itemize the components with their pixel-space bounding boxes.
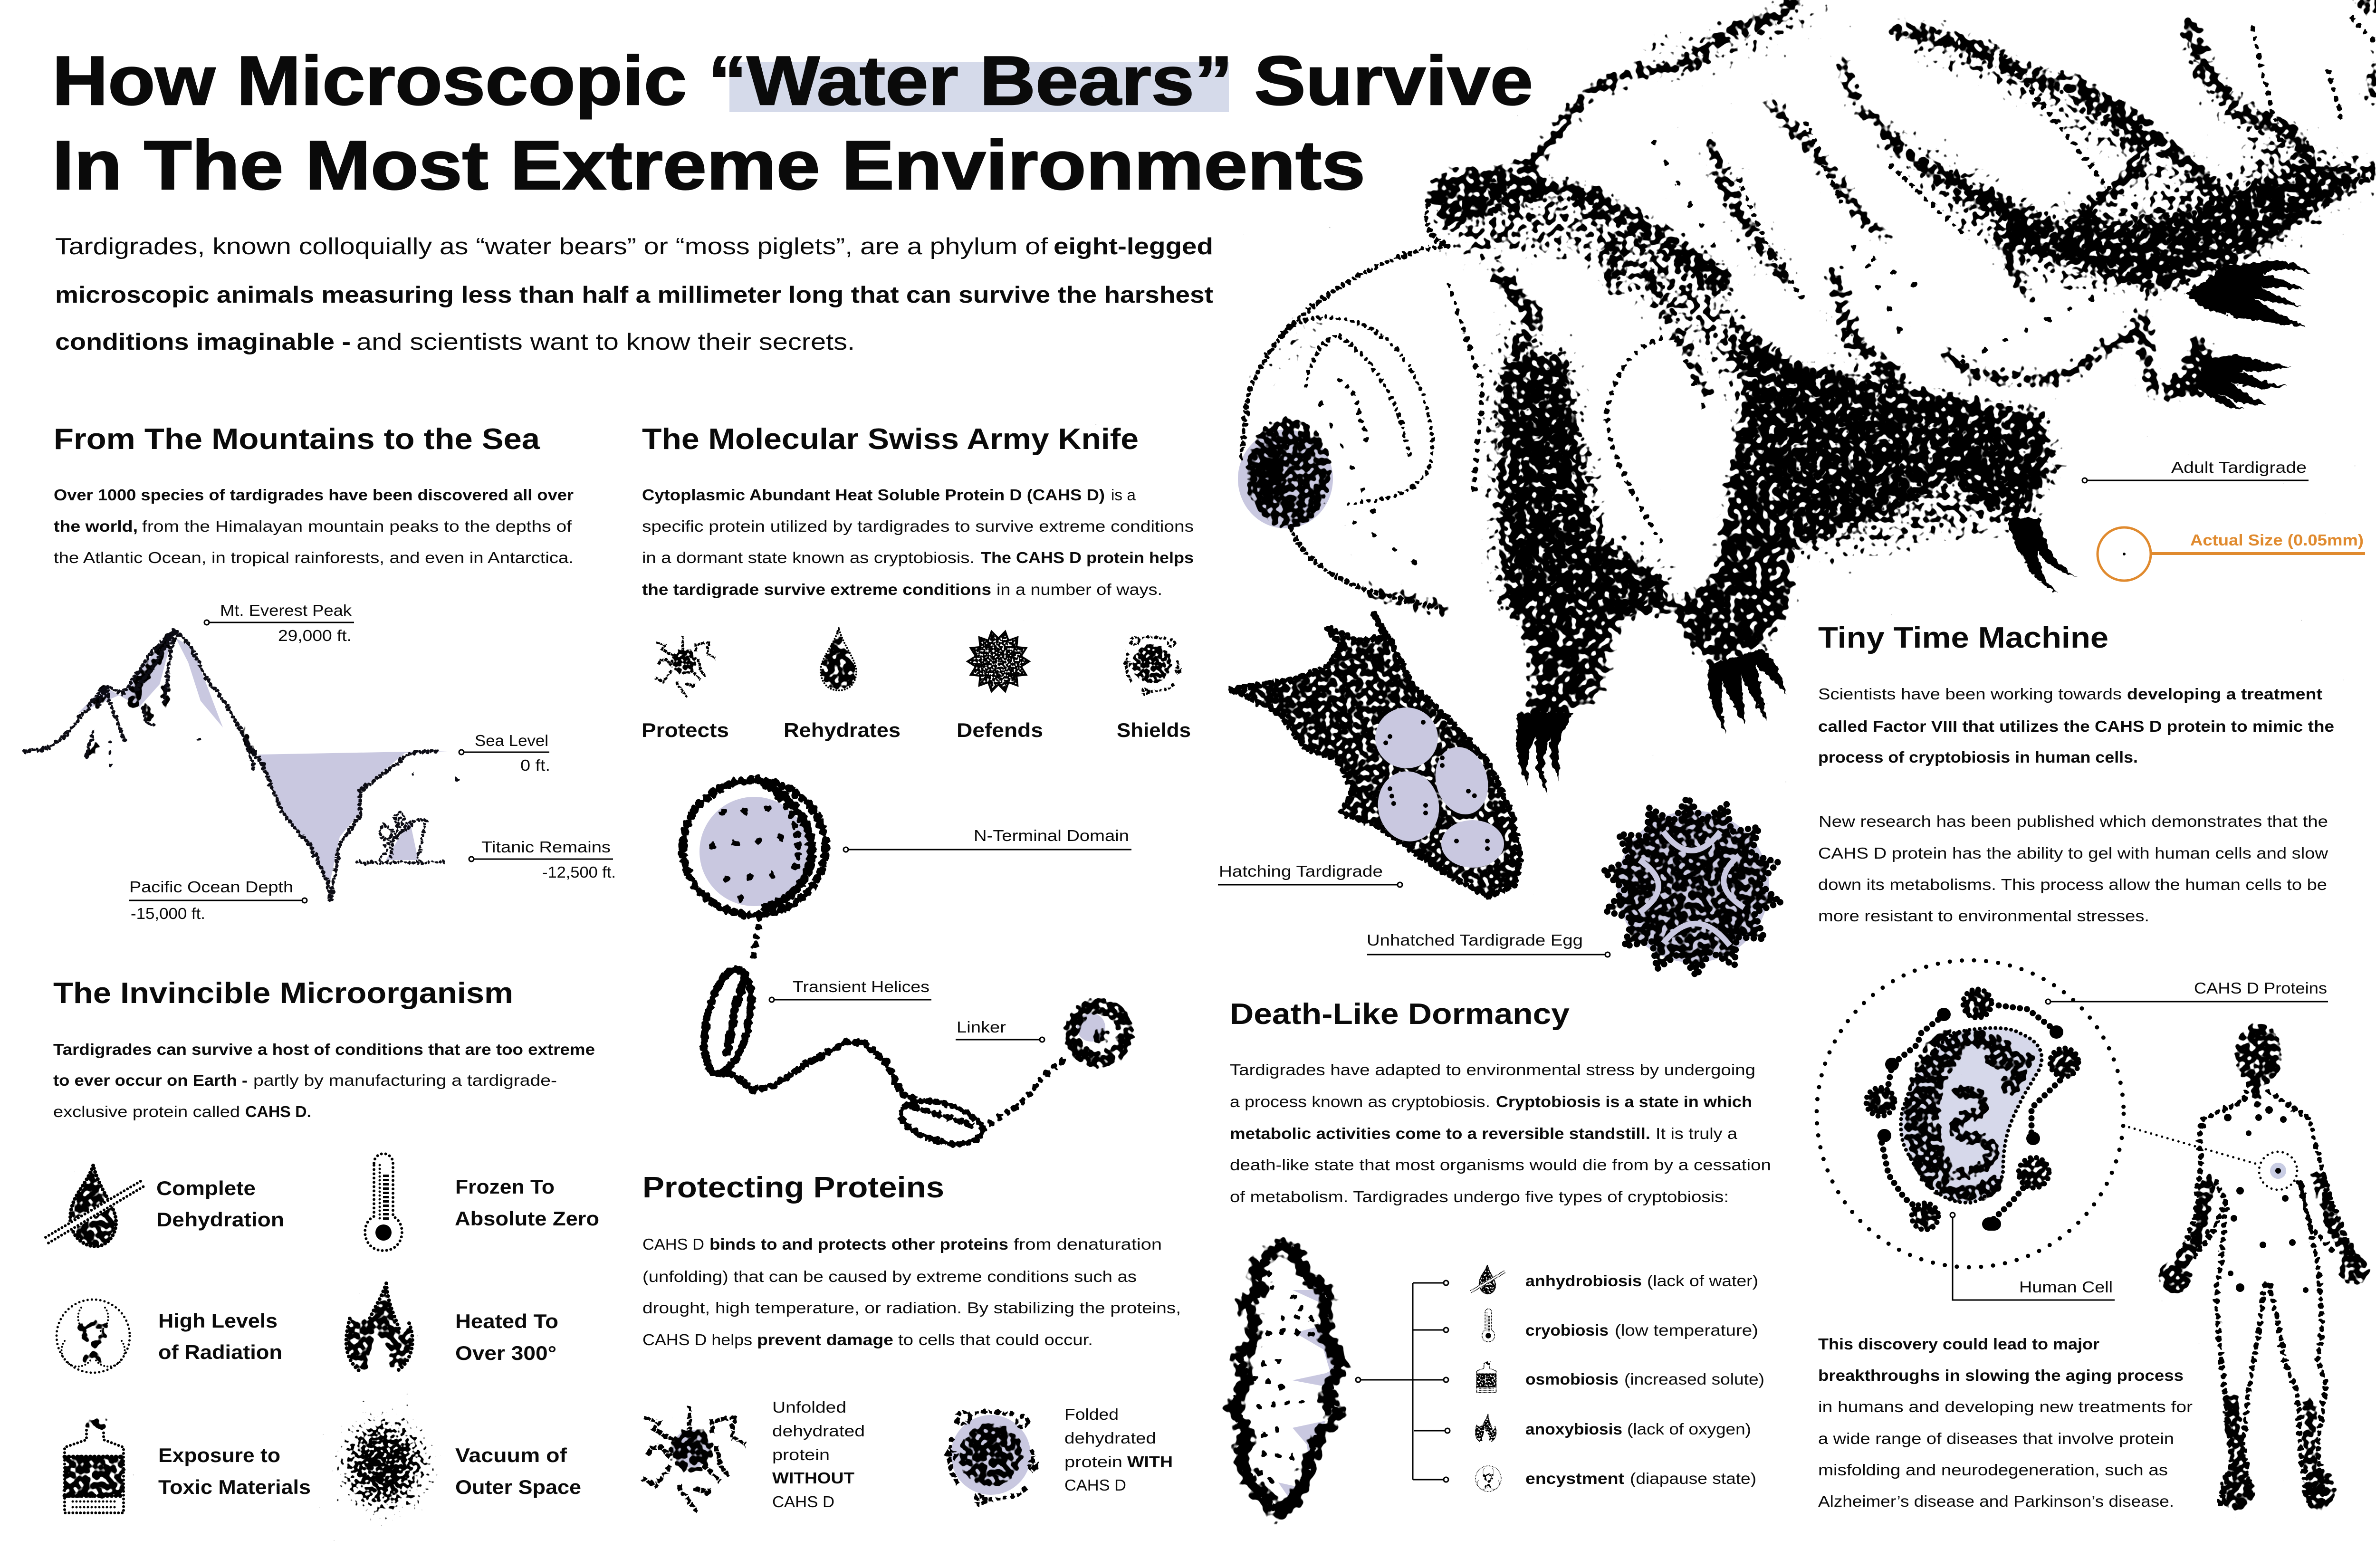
linker chain [729,918,1068,1128]
unfolded protein [642,1398,865,1512]
body text: in a dormant state known as cryptobiosis. [642,549,975,566]
condition: high levels of radiation: High Levels [158,1310,278,1332]
shell outline [1231,613,1521,897]
tun inner dots [1255,1273,1321,1487]
closing text [1818,1335,2193,1510]
curved folds [1639,832,1744,946]
label [1367,931,1610,957]
label: linker: Linker [957,1018,1006,1036]
body text [642,486,1194,598]
function: rehydrates: Rehydrates [784,719,901,741]
body text: the world, [54,517,138,535]
cell dots [1385,722,1487,851]
closing text: a wide range of diseases that involve protein [1818,1430,2174,1447]
body text: from denaturation [1014,1235,1162,1253]
condition: frozen to absolute zero: Frozen To [455,1176,555,1198]
head and dense limbs [2158,1023,2371,1511]
body text: in a number of ways. [996,581,1162,598]
tun shading [1278,1251,1341,1503]
heading: From The Mountains to the Sea [54,423,540,456]
body text: prevent damage [757,1331,893,1348]
function: rehydrates [784,628,901,741]
body text: (unfolding) that can be caused by extreme conditions such as [642,1268,1137,1285]
folded protein: dehydrated [1064,1429,1156,1447]
label: pacific depth: Pacific Ocean Depth [129,878,293,896]
heading: The Molecular Swiss Army Knife [642,423,1139,456]
condition: high levels of radiation [57,1300,282,1373]
body text: partly by manufacturing a tardigrade- [253,1071,557,1089]
body text: of metabolism. Tardigrades undergo five types of cryptobiosis: [1230,1188,1729,1205]
label: human cell: Human Cell [2019,1278,2113,1296]
title [52,42,1533,204]
embryo cells [1372,708,1504,868]
label: helices: Transient Helices [793,978,929,995]
heading: Tiny Time Machine [1818,621,2108,654]
label: Unhatched Tardigrade Egg [1367,931,1583,949]
cell membrane [1901,1028,2042,1203]
body text: is a [1111,486,1136,504]
unfolded protein: dehydrated [772,1422,865,1440]
section: the invincible microorganism [46,977,599,1513]
peak stipple [90,637,252,755]
closing text: This discovery could lead to major [1818,1335,2099,1353]
closing text: in humans and developing new treatments for [1818,1398,2193,1415]
ocean and mountain fill [78,631,458,885]
condition: frozen to absolute zero [365,1154,599,1251]
body text: death-like state that most organisms would die from by a cessation [1230,1156,1771,1174]
diagram: CAHS D protein structure [683,780,1131,1151]
label: pacific depth: -15,000 ft. [131,905,205,922]
closing text: misfolding and neurodegeneration, such as [1818,1461,2168,1479]
label: Hatching Tardigrade [1219,862,1383,880]
body text: to ever occur on Earth - [53,1071,248,1089]
condition: toxic materials: Exposure to [158,1444,280,1466]
section: protecting proteins [642,1171,1181,1512]
unfolded protein: protein [772,1446,830,1463]
function: shields [1117,637,1191,741]
condition: vacuum of outer space [341,1417,581,1512]
condition: heated to over 300 [346,1283,558,1371]
body text: CAHS D. [245,1103,311,1120]
label: sea level: Sea Level [475,732,548,749]
stippled shading [1369,0,2376,730]
section: tiny time machine [1817,621,2371,1511]
intro paragraph: microscopic animals measuring less than half a millimeter long that can survive the harshest [55,282,1213,308]
dormant tun illustration [1233,1246,1341,1512]
body text: called Factor VIII that utilizes the CAHS D protein to mimic the [1818,717,2334,735]
type: cryobiosis: cryobiosis [1525,1321,1609,1339]
folded protein [946,1405,1173,1505]
stippled ridge [25,630,456,900]
body text [1818,685,2334,925]
body text: Cytoplasmic Abundant Heat Soluble Protein D (CAHS D) [642,486,1105,504]
label: n-terminal [843,827,1131,852]
body text: Tardigrades can survive a host of conditions that are too extreme [53,1041,595,1058]
tun outline [1233,1246,1341,1512]
body text: metabolic activities come to a reversible standstill. [1230,1125,1650,1142]
body text: CAHS D [642,1235,704,1253]
function: defends [957,631,1043,741]
body text [53,1041,595,1120]
type: anoxybiosis: (lack of oxygen) [1627,1420,1751,1438]
label: human cell [1950,1213,2115,1300]
type: encystment: encystment [1525,1470,1624,1487]
heading: Death-Like Dormancy [1230,998,1570,1031]
body text: binds to and protects other proteins [709,1235,1008,1253]
condition: vacuum of outer space: Vacuum of [455,1444,567,1466]
condition: toxic materials: Toxic Materials [158,1476,311,1498]
function: protects: Protects [642,719,729,741]
function: protects [642,636,729,741]
stippled shell [1231,613,1521,897]
label: titanic: -12,500 ft. [542,863,616,881]
unfolded protein: Unfolded [772,1398,846,1416]
body text [642,1235,1181,1348]
label: cahs d proteins: CAHS D Proteins [2194,979,2327,997]
spiky stippled shell [1588,785,1795,988]
label: cahs d proteins [2046,979,2328,1004]
callout: actual size: Actual Size (0.05mm) [2190,531,2364,549]
body text: Tardigrades have adapted to environmental stress by undergoing [1230,1061,1755,1079]
type: encystment: (diapause state) [1630,1470,1756,1487]
stippled outline [2179,1084,2347,1506]
section: the molecular swiss army knife [642,423,1194,1151]
body text: Scientists have been working towards [1818,685,2122,703]
chart: mountain and ocean elevation profile [25,602,616,922]
condition: complete dehydration: Complete [156,1177,256,1199]
label: linker [956,1018,1044,1042]
cell body [1901,1028,2042,1203]
folded protein: WITH [1127,1453,1173,1471]
label: titanic: Titanic Remains [481,838,611,856]
type: encystment [1475,1466,1756,1492]
label: everest: Mt. Everest Peak [220,602,352,619]
condition: heated to over 300: Heated To [455,1310,558,1332]
body text [54,486,574,566]
type: anhydrobiosis: (lack of water) [1647,1272,1758,1290]
body text: The CAHS D protein helps [981,549,1194,566]
body text: the tardigrade survive extreme conditions [642,581,991,598]
eye [1238,417,1333,529]
section: death-like dormancy [1230,998,1771,1512]
condition: frozen to absolute zero: Absolute Zero [455,1207,599,1230]
intro paragraph: and scientists want to know their secrets. [356,329,855,355]
label: pacific depth [129,878,307,922]
type: cryobiosis [1482,1309,1758,1342]
title highlight [729,62,1229,112]
outlines and dotted folds [1241,19,2376,611]
spiky outline [1588,785,1795,988]
body text: from the Himalayan mountain peaks to the depths of [142,517,572,535]
unfolded protein: CAHS D [772,1493,834,1511]
intro paragraph: conditions imaginable - [55,329,351,355]
intro paragraph: Tardigrades, known colloquially as “water bears” or “moss piglets”, are a phylum of [55,234,1048,259]
type: anoxybiosis: anoxybiosis [1525,1420,1622,1438]
label: titanic [469,838,616,881]
title: In The Most Extreme Environments [52,126,1365,204]
body text: CAHS D protein has the ability to gel with human cells and slow [1818,844,2328,862]
human cell magnified [1817,960,2328,1300]
body text: CAHS D helps [642,1331,752,1348]
hatching tardigrade illustration [1218,613,1521,897]
function: defends: Defends [957,719,1043,741]
branching connector [1356,1281,1450,1482]
helix 2 [896,1093,987,1151]
unhatched egg illustration [1367,785,1795,988]
soft stipple fade [1255,0,2376,618]
body text: specific protein utilized by tardigrades to survive extreme conditions [642,517,1194,535]
body text: to cells that could occur. [898,1331,1093,1348]
heading: The Invincible Microorganism [53,977,513,1010]
helix 1 [696,965,759,1078]
type: anhydrobiosis [1471,1265,1758,1294]
type: osmobiosis [1476,1361,1764,1393]
intro paragraph: eight-legged [1054,234,1213,259]
body text: process of cryptobiosis in human cells. [1818,748,2138,766]
condition: toxic materials [63,1419,311,1513]
label: sea level: 0 ft. [520,756,550,774]
body text: Cryptobiosis is a state in which [1496,1093,1752,1110]
label: everest [204,602,354,644]
heading: Protecting Proteins [642,1171,944,1204]
label: adult tardigrade: Adult Tardigrade [2171,459,2307,476]
body text: down its metabolisms. This process allow the human cells to be [1818,876,2327,893]
body text: a process known as cryptobiosis. [1230,1093,1490,1110]
connector from lens to body [2124,1126,2261,1165]
label: everest: 29,000 ft. [278,627,352,644]
dotted lens circle [1817,960,2124,1267]
body text: exclusive protein called [53,1103,240,1120]
section: from the mountains to the sea [25,423,616,922]
body text: New research has been published which demonstrates that the [1819,813,2328,830]
callout: actual size [2098,527,2365,581]
body text: Over 1000 species of tardigrades have been discovered all over [54,486,574,504]
type: anhydrobiosis: anhydrobiosis [1525,1272,1642,1290]
label: helices [769,978,931,1002]
condition: complete dehydration: Dehydration [156,1208,284,1231]
condition: high levels of radiation: of Radiation [158,1341,282,1363]
shipwreck: titanic [356,813,447,862]
folded protein: Folded [1064,1405,1119,1423]
title: How Microscopic “Water Bears” Survive [52,42,1533,119]
function: shields: Shields [1117,719,1191,741]
main tardigrade illustration [1238,0,2376,795]
body text: drought, high temperature, or radiation. By stabilizing the proteins, [642,1299,1181,1317]
label [1218,862,1402,887]
type: cryobiosis: (low temperature) [1615,1321,1758,1339]
type: osmobiosis: (increased solute) [1624,1370,1764,1388]
unfolded protein: WITHOUT [772,1469,854,1487]
label: adult tardigrade [2082,459,2309,483]
c-terminal domain [1072,1006,1125,1060]
body text: more resistant to environmental stresses. [1818,907,2149,925]
body dots [2224,1106,2309,1293]
body text [1230,1061,1771,1205]
n-terminal domain [683,780,825,915]
condition: complete dehydration [46,1166,284,1246]
egg base [1617,811,1769,963]
label: sea level [459,732,550,774]
type: osmobiosis: osmobiosis [1525,1370,1619,1388]
closing text: breakthroughs in slowing the aging process [1818,1367,2184,1384]
body text: It is truly a [1656,1125,1738,1142]
folded protein: protein [1064,1453,1122,1471]
tun rim dots [1233,1246,1341,1512]
CAHS D proteins around cell [1865,988,2079,1231]
folded protein: CAHS D [1064,1476,1126,1494]
claws [1516,260,2311,795]
body text: the Atlantic Ocean, in tropical rainforests, and even in Antarctica. [54,549,574,566]
human figure [2158,1023,2371,1511]
type: anoxybiosis [1475,1415,1751,1442]
condition: heated to over 300: Over 300° [455,1342,556,1364]
cell location marker [2259,1152,2297,1190]
closing text: Alzheimer’s disease and Parkinson’s disease. [1818,1492,2174,1510]
condition: vacuum of outer space: Outer Space [455,1476,581,1498]
label: n-terminal: N-Terminal Domain [974,827,1129,844]
intro paragraph [55,234,1213,355]
cell stipple [1922,1039,2022,1194]
body text: developing a treatment [2127,685,2322,703]
